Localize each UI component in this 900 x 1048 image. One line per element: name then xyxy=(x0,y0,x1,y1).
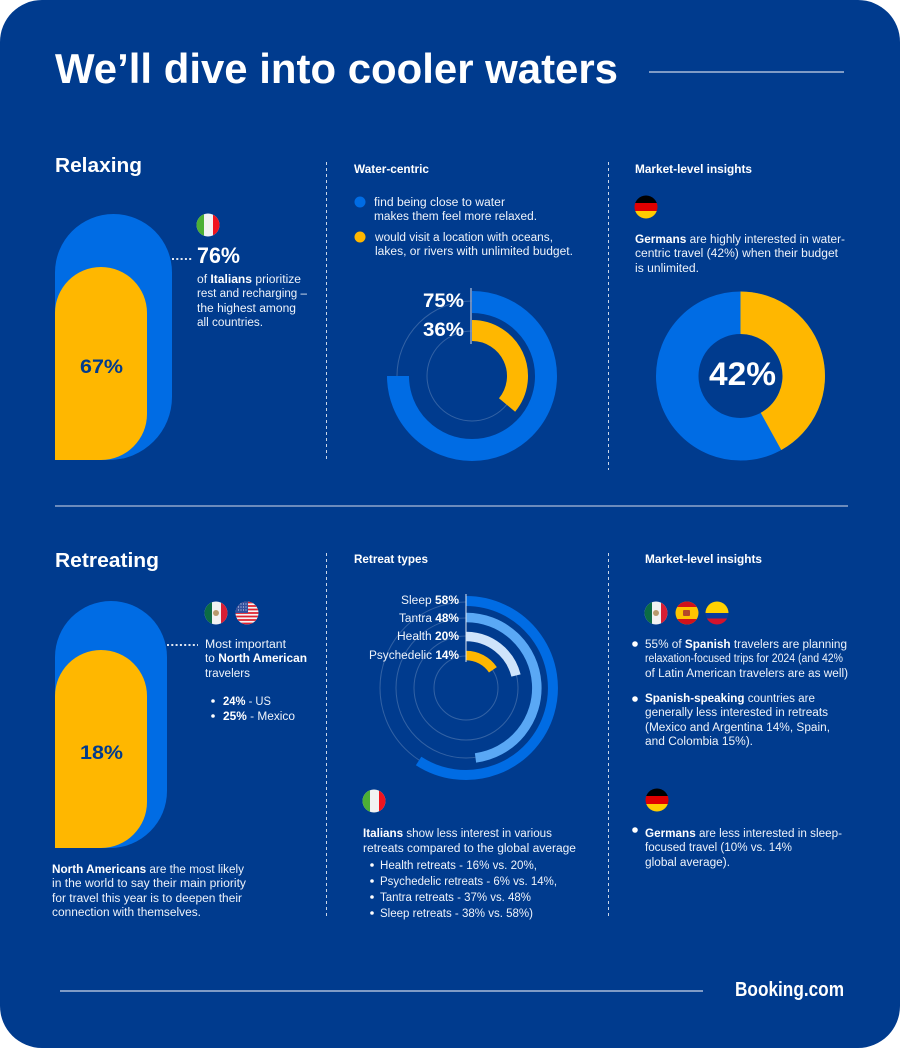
text: Germans sleep travel: focused travel (10% vs. 14% xyxy=(645,842,792,854)
value: 18%: 18% xyxy=(80,743,123,764)
chart: retreat types radial: Psychedelic 14% xyxy=(369,650,459,662)
chart: water-centric radial xyxy=(397,288,547,451)
text: Germans sleep travel: global average). xyxy=(645,857,730,869)
callout: Italians 76% xyxy=(172,213,308,329)
text: Italians retreats: retreats compared to the global average xyxy=(363,843,576,855)
heading: Retreat types: Retreat types xyxy=(354,554,428,566)
legend: water-centric: find being close to water xyxy=(374,197,505,209)
callout: Italians 76%: of Italians prioritize xyxy=(197,274,301,286)
text: Spanish-speaking countries xyxy=(632,693,830,748)
text: North Americans: connection with themselves. xyxy=(52,907,201,919)
heading: Water-centric: Water-centric xyxy=(354,164,430,176)
text: Italians retreats: Psychedelic retreats - 6% vs. 14%, xyxy=(380,876,557,888)
callout: North American travelers: 24% - US xyxy=(223,696,271,708)
chart: retreat types radial xyxy=(369,594,553,775)
icon: Mexico flag xyxy=(204,601,228,625)
callout: North American travelers: Most important xyxy=(205,639,287,651)
callout: North American travelers: 25% - Mexico xyxy=(223,711,295,723)
text: Germans water-centric: is unlimited. xyxy=(635,263,699,275)
chart: retreat types radial: Health 20% xyxy=(397,631,459,643)
text: North Americans xyxy=(52,864,246,919)
text: Spanish-speaking countries: and Colombia 15%). xyxy=(645,736,753,748)
callout: Italians 76%: all countries. xyxy=(197,317,263,329)
text: North Americans: North Americans are the most likely xyxy=(52,864,244,876)
text: Spanish travelers xyxy=(632,639,848,680)
icon: USA flag xyxy=(235,601,259,625)
legend: water-centric xyxy=(354,196,573,258)
text: Germans sleep travel xyxy=(632,827,842,869)
legend: water-centric: lakes, or rivers with unlimited budget. xyxy=(375,246,573,258)
text: Spanish-speaking countries: generally less interested in retreats xyxy=(645,707,828,719)
text: Germans water-centric: Germans are highly interested in water- xyxy=(635,234,845,246)
text: Italians retreats: Sleep retreats - 38% vs. 58%) xyxy=(380,908,533,920)
text: Italians retreats: Tantra retreats - 37% vs. 48% xyxy=(380,892,531,904)
text: Germans water-centric xyxy=(635,234,845,275)
chart: retreating pills xyxy=(55,601,167,848)
heading: Retreating: Retreating xyxy=(55,549,159,572)
logo: Booking.com: Booking.com xyxy=(735,979,844,1001)
text: Germans sleep travel: Germans are less interested in sleep- xyxy=(645,828,842,840)
legend: water-centric: would visit a location with oceans, xyxy=(374,232,553,244)
chart: 42% donut: 42% xyxy=(709,356,776,392)
heading: Relaxing: Relaxing xyxy=(55,154,142,177)
text: Spanish travelers: 55% of Spanish travelers are planning xyxy=(645,639,847,651)
chart: relaxing pills xyxy=(55,214,172,460)
callout: North American travelers: to North American xyxy=(205,653,307,665)
value: 67%: 67% xyxy=(80,357,123,378)
text: Italians retreats: Italians show less interest in various xyxy=(363,828,552,840)
callout: North American travelers: travelers xyxy=(205,668,250,680)
callout: North American travelers xyxy=(167,601,307,723)
icon: Germany flag xyxy=(645,788,669,812)
chart: retreat types radial: Sleep 58% xyxy=(401,595,459,607)
text: Spanish-speaking countries: (Mexico and Argentina 14%, Spain, xyxy=(645,722,830,734)
text: Spanish travelers: of Latin American travelers are as well) xyxy=(645,668,848,680)
text: Spanish travelers: relaxation-focused trips for 2024 (and 42% xyxy=(645,653,843,665)
callout: Italians 76%: rest and recharging – xyxy=(197,288,308,300)
heading: Market-level insights: Market-level insights xyxy=(645,554,762,566)
callout: Italians 76%: 76% xyxy=(197,243,240,268)
chart: 42% donut xyxy=(677,313,804,439)
text: Spanish-speaking countries: Spanish-speaking countries are xyxy=(645,693,815,705)
icons: Mexico, Spain, Colombia flags xyxy=(644,601,729,626)
chart: water-centric radial: 36% xyxy=(423,319,464,341)
text: North Americans: for travel this year is to deepen their xyxy=(52,893,242,905)
legend: water-centric: makes them feel more relaxed. xyxy=(374,211,537,223)
title: We’ll dive into cooler waters xyxy=(55,45,618,92)
text: Italians retreats: Health retreats - 16% vs. 20%, xyxy=(380,860,537,872)
heading: Market-level insights: Market-level insights xyxy=(635,164,752,176)
chart: water-centric radial: 75% xyxy=(423,290,464,312)
text: Germans water-centric: centric travel (42%) when their budget xyxy=(635,248,839,260)
text: North Americans: in the world to say their main priority xyxy=(52,878,246,890)
chart: retreat types radial: Tantra 48% xyxy=(399,613,459,625)
text: Italians retreats xyxy=(363,828,576,920)
callout: Italians 76%: the highest among xyxy=(197,303,296,315)
icon: Germany flag xyxy=(634,195,658,219)
icon: Italy flag xyxy=(196,213,220,237)
icon: Italy flag xyxy=(362,789,386,813)
